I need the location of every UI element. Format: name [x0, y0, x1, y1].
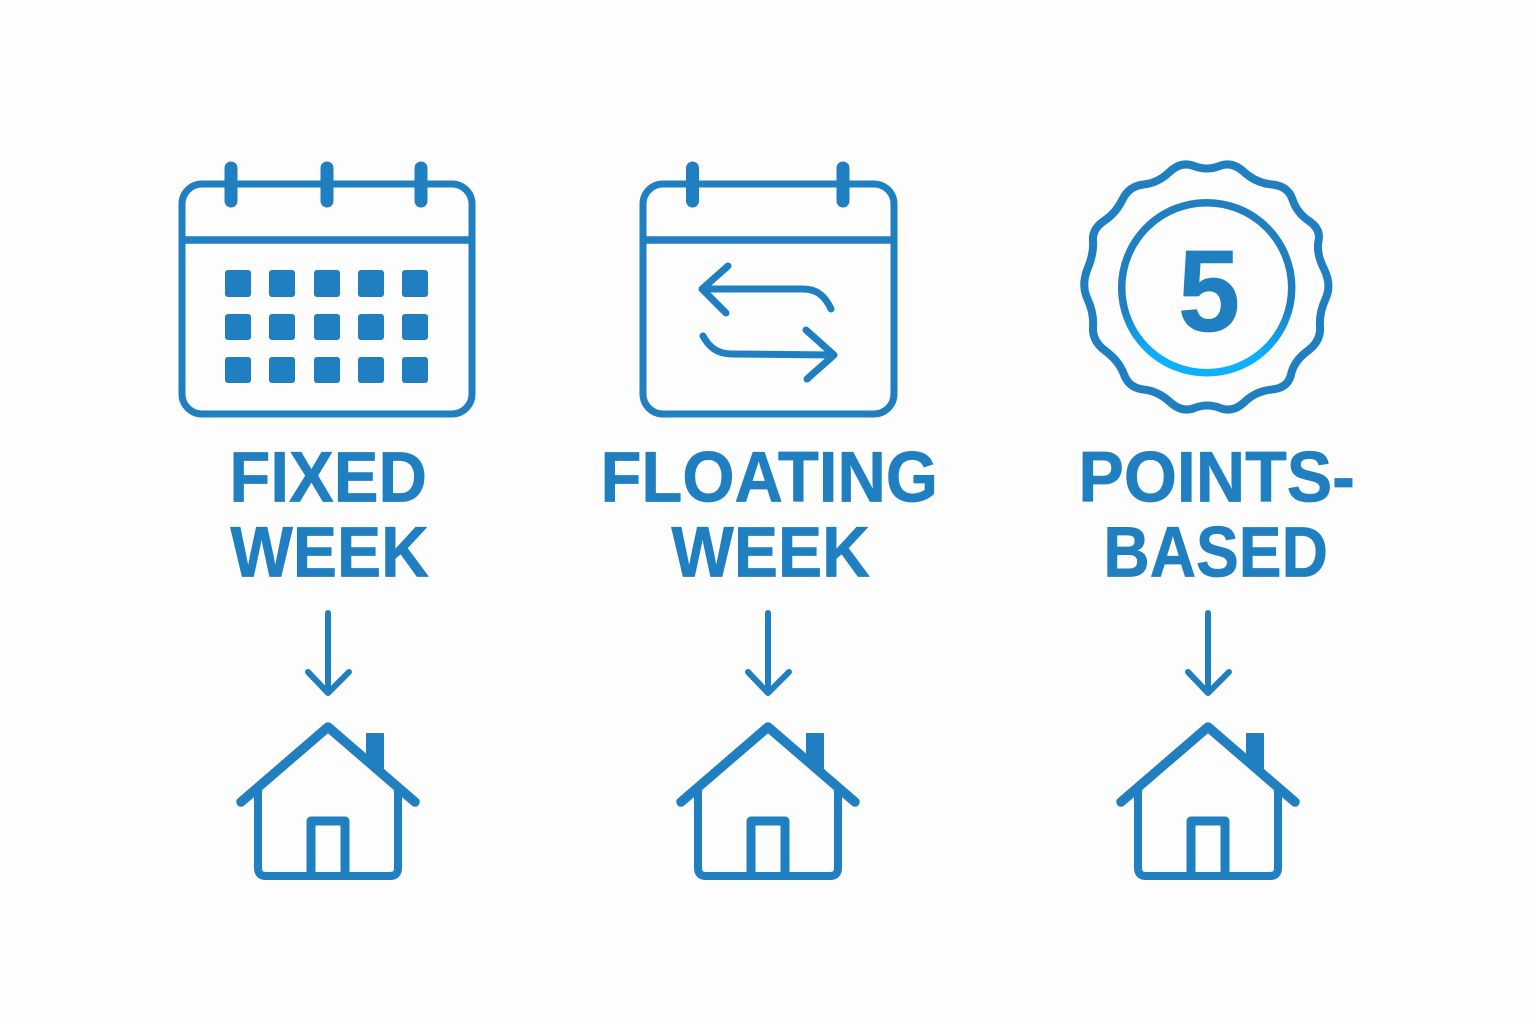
arrow: floating week to house [748, 613, 789, 693]
heading: floating week: FLOATING [600, 439, 938, 518]
heading: points-based: BASED [1103, 513, 1328, 592]
heading: fixed week: WEEK [230, 513, 429, 592]
icon: points badge with number 5: 5 [1178, 226, 1240, 356]
icon: house for floating week [681, 727, 855, 876]
arrow: points-based to house [1188, 613, 1229, 693]
icon: house for fixed week [241, 727, 415, 876]
icon: floating week calendar [643, 168, 894, 414]
arrow: fixed week to house [308, 613, 349, 693]
heading: floating week: WEEK [671, 513, 870, 592]
heading: floating week [600, 439, 938, 592]
heading: fixed week [229, 439, 429, 592]
icon: house for points-based [1121, 727, 1295, 876]
heading: points-based [1078, 439, 1355, 592]
icon: points badge with number 5 [1084, 164, 1328, 410]
heading: points-based: POINTS- [1078, 439, 1355, 518]
icon: fixed week calendar [182, 168, 472, 414]
heading: fixed week: FIXED [229, 439, 427, 518]
